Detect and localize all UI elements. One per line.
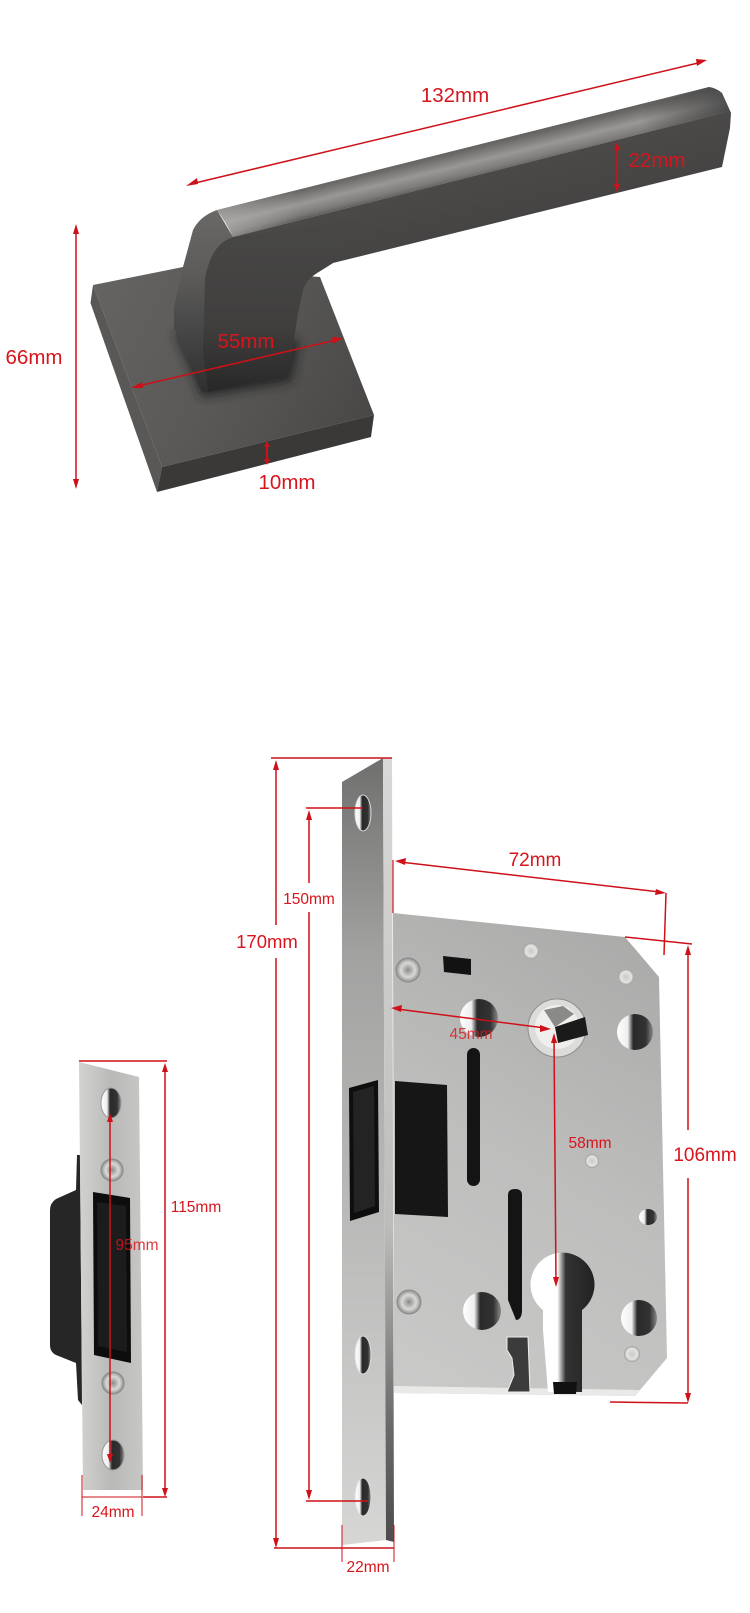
- dimension: 132mm: 132mm: [421, 84, 489, 107]
- small black window: [443, 956, 471, 975]
- dimension: 170mm: 170mm: [236, 931, 298, 952]
- dimension: 58mm: [551, 1033, 612, 1287]
- strike plate dimensions: [79, 1061, 221, 1521]
- dimension: 22mm width: [274, 1525, 394, 1576]
- dimension: 45mm: [391, 1005, 551, 1043]
- plate holes and screws: [101, 1088, 124, 1470]
- lock case: [393, 913, 667, 1396]
- lever top face: [217, 87, 731, 237]
- dimension: 24mm: [82, 1475, 142, 1521]
- dimension: 55mm: [131, 330, 343, 388]
- dimension: 24mm: 24mm: [91, 1504, 135, 1521]
- dimension: 132mm: [186, 59, 707, 186]
- lever handle: [174, 87, 731, 393]
- dimension: 66mm: 66mm: [6, 346, 62, 369]
- steel plate: [79, 1062, 143, 1490]
- dimension: 115mm: 115mm: [171, 1199, 221, 1216]
- square rose plate: [90, 267, 374, 492]
- dimension: 115mm: [79, 1061, 221, 1497]
- screws and rivets: [396, 943, 640, 1362]
- faceplate holes: [355, 795, 371, 1516]
- lever side: [174, 210, 233, 393]
- strike plate: [50, 1062, 143, 1490]
- dimension: 170mm: [236, 758, 392, 1548]
- dimension: 58mm: 58mm: [568, 1135, 612, 1152]
- dimension: 45mm: 45mm: [449, 1026, 493, 1043]
- dimension: 55mm: 55mm: [218, 330, 274, 353]
- black window: [93, 1192, 131, 1363]
- dimension: 106mm: 106mm: [673, 1145, 737, 1166]
- dimension: 10mm: 10mm: [259, 471, 315, 494]
- door handle: [90, 87, 731, 492]
- dimension: 150mm: [283, 808, 368, 1501]
- round holes: [460, 999, 657, 1336]
- lever arm face: [203, 113, 731, 392]
- handle dimensions: [6, 59, 707, 494]
- dimension: 22mm width: 22mm: [346, 1559, 390, 1576]
- stem face: [203, 220, 360, 392]
- dimension: 106mm: [610, 945, 737, 1403]
- dimension: 95mm: [107, 1113, 159, 1463]
- dimension: 72mm: [393, 850, 692, 955]
- dimension: 95mm: 95mm: [115, 1237, 159, 1254]
- dimension: 150mm: 150mm: [283, 891, 335, 908]
- large black cut-out: [395, 1081, 448, 1217]
- vertical slots: [467, 1048, 522, 1320]
- spindle follower: [528, 999, 588, 1057]
- latch bolt: [349, 1080, 379, 1221]
- dimension: 10mm: [259, 441, 315, 494]
- cylinder bottom boss: [553, 1382, 577, 1394]
- black plastic box: [50, 1155, 82, 1405]
- dimension: 22mm: 22mm: [629, 149, 685, 172]
- dimension: 22mm: [614, 142, 685, 192]
- dimension: 66mm: [6, 224, 79, 489]
- dimension: 72mm: 72mm: [509, 850, 561, 871]
- lock dimensions: [236, 758, 737, 1576]
- faceplate: [342, 758, 394, 1545]
- euro cylinder keyhole: [531, 1253, 594, 1392]
- keyed notch: [507, 1337, 530, 1392]
- mortise lock: [342, 758, 667, 1545]
